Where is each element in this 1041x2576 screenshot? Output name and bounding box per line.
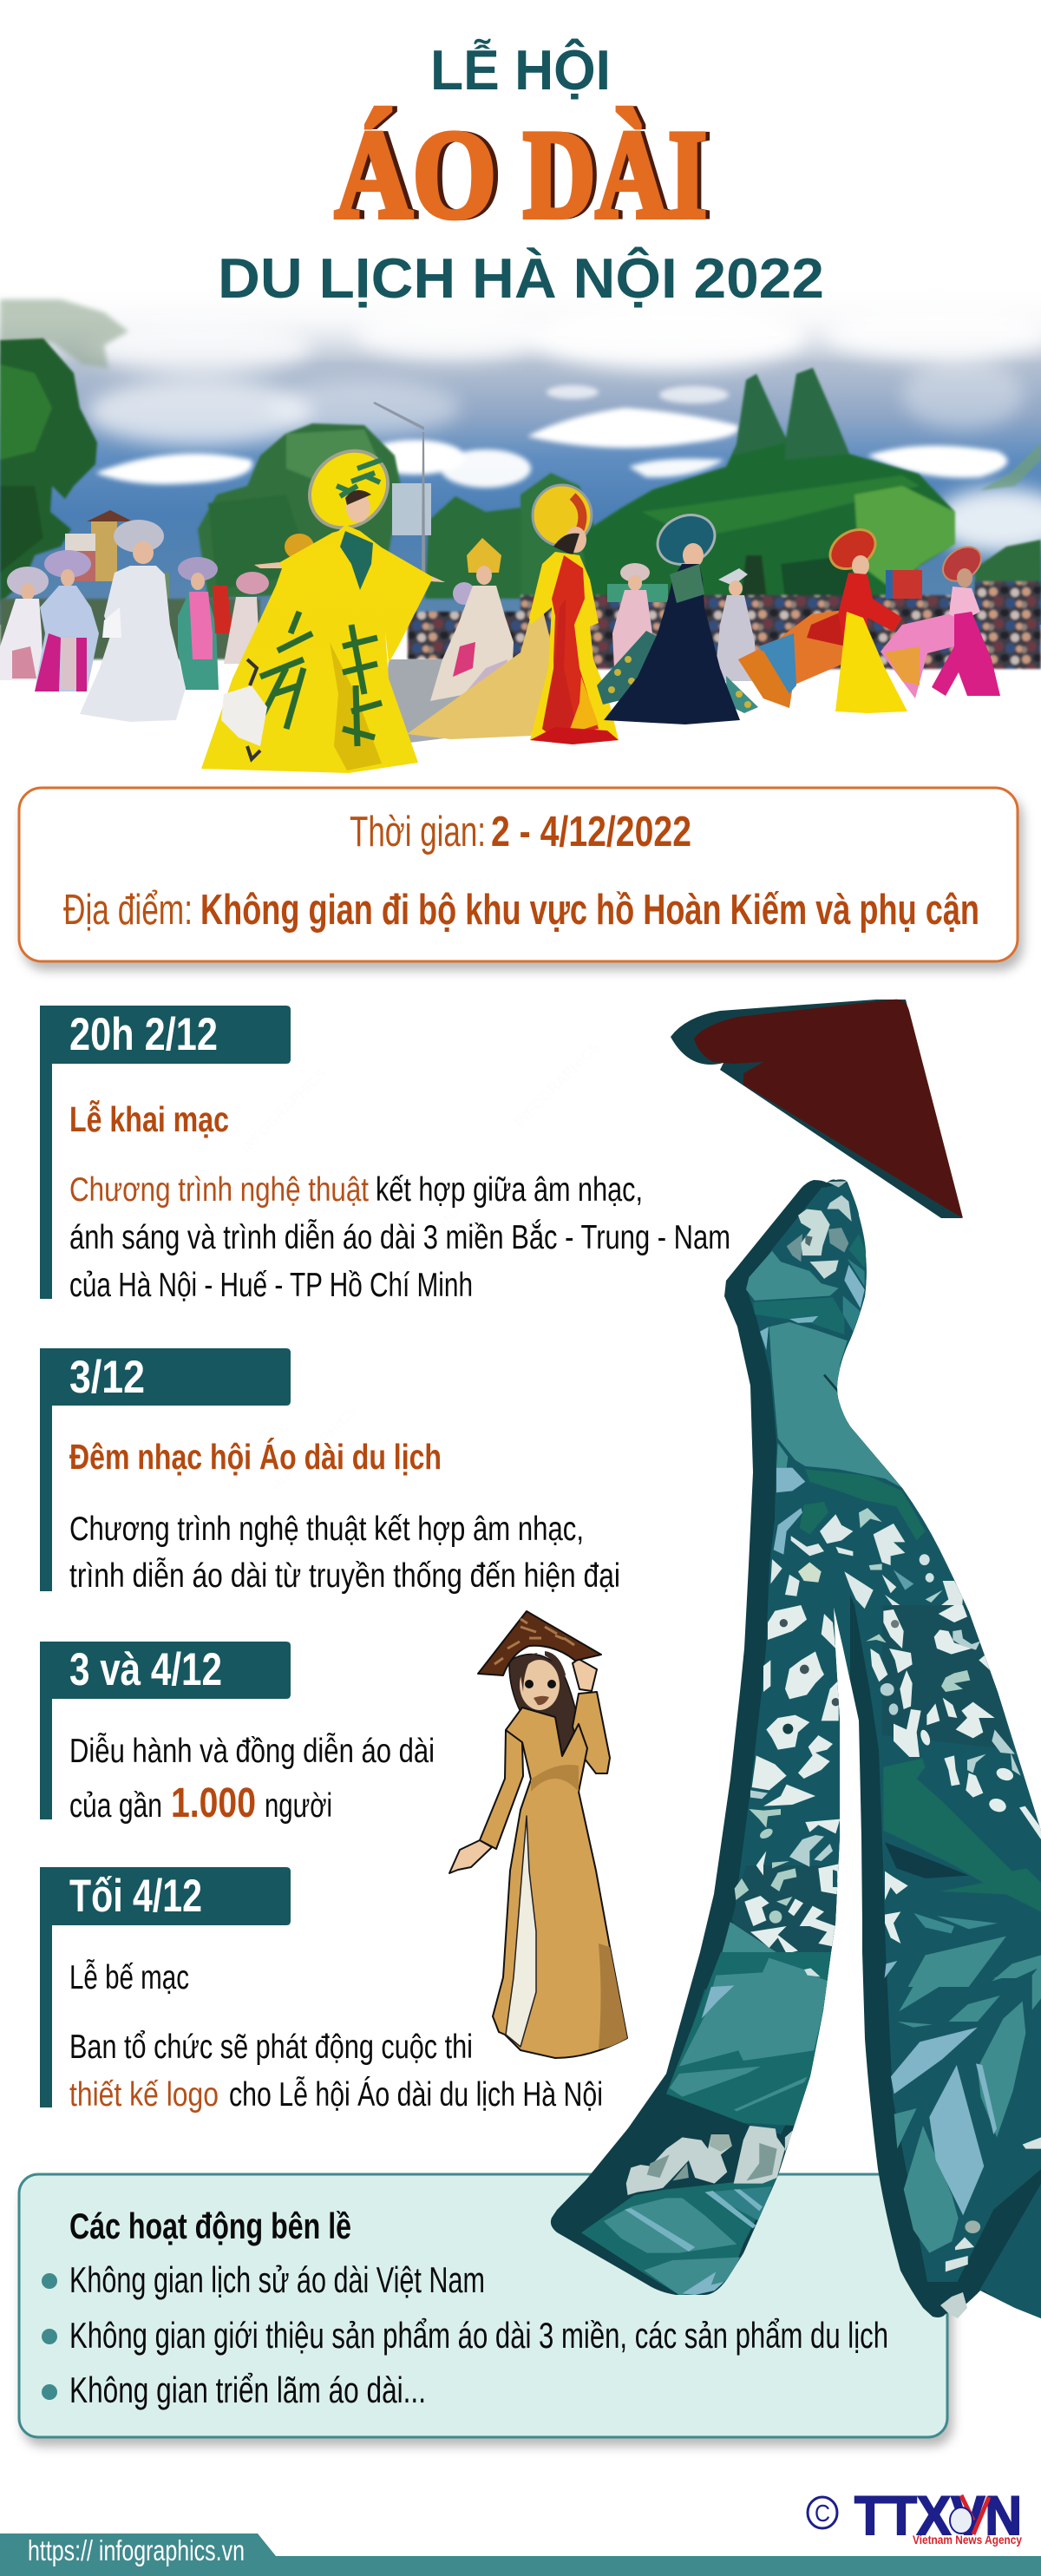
fringe bbox=[520, 1651, 566, 1692]
title line 2: áo dài: ÁO bbox=[335, 104, 496, 245]
body text: 1.000 bbox=[171, 1780, 256, 1826]
hair back bbox=[509, 1654, 579, 1756]
dress shade bbox=[599, 1943, 627, 2049]
body text: ánh sáng và trình diễn áo dài 3 miền Bắc - Trung - Nam bbox=[69, 1219, 730, 1256]
website url: https:// infographics.vn bbox=[28, 2534, 245, 2566]
title line 3: DU LỊCH HÀ NỘI 2022 bbox=[218, 246, 824, 310]
bullet 3: Không gian triển lãm áo dài... bbox=[69, 2370, 426, 2410]
copyright sign bbox=[808, 2497, 837, 2528]
watermarks: INFOGRAPHICS bbox=[238, 1065, 330, 1157]
dancer beige with gold crown bbox=[430, 538, 514, 701]
logo: TTXVN bbox=[808, 2486, 1022, 2547]
agency name: Vietnam News Agency bbox=[913, 2533, 1022, 2547]
raised arm bbox=[573, 1692, 610, 1773]
section: 3 và 4/12 bbox=[40, 1642, 435, 1826]
dress bbox=[493, 1708, 627, 2058]
conical hat bbox=[671, 1000, 963, 1218]
title line 1: LỄ HỘI bbox=[430, 38, 611, 102]
body text: kết hợp giữa âm nhạc, bbox=[376, 1171, 643, 1209]
mid-skirt shapes bbox=[713, 1605, 1041, 1987]
body text: Ban tổ chức sẽ phát động cuộc thi bbox=[69, 2029, 473, 2066]
time line bbox=[350, 809, 691, 855]
body text: của gần bbox=[69, 1787, 162, 1825]
inner fabric, left of and around the slit bbox=[666, 1180, 1041, 2282]
date: 20h 2/12 bbox=[69, 1009, 218, 1060]
body text bbox=[69, 1959, 603, 2114]
panel heading: Các hoạt động bên lề bbox=[69, 2206, 351, 2246]
gold crown behind main dancer bbox=[285, 534, 314, 560]
bullet 1 bbox=[42, 2259, 485, 2300]
left hand bbox=[449, 1840, 492, 1873]
dancer: navy dress with peacock train bbox=[597, 506, 758, 724]
watermarks: INFOGRAPHICS bbox=[494, 1819, 586, 1911]
dress fabric pattern bbox=[581, 1180, 1041, 2328]
white trousers bbox=[506, 1816, 536, 2047]
body text bbox=[69, 1511, 620, 1595]
section: Tối 4/12 bbox=[40, 1867, 603, 2114]
copyright sign: C bbox=[815, 2500, 830, 2527]
panel: time and place bbox=[19, 788, 1018, 961]
tab and rule bbox=[40, 1006, 291, 1299]
title line 2: áo dài: DÀI bbox=[527, 104, 711, 245]
place line: Địa điểm: bbox=[63, 887, 193, 934]
date: 3/12 bbox=[69, 1352, 145, 1403]
buildings and lamp post bbox=[61, 402, 431, 599]
dancer pink and green bbox=[178, 557, 219, 690]
title line 2: áo dài bbox=[335, 104, 711, 245]
body text: trình diễn áo dài từ truyền thống đến hiện đại bbox=[69, 1557, 620, 1595]
title line 2: áo dài: ÁO bbox=[340, 104, 501, 245]
date: 3 và 4/12 bbox=[69, 1644, 222, 1695]
body text: Diễu hành và đồng diễn áo dài bbox=[69, 1733, 435, 1770]
time line: 2 - 4/12/2022 bbox=[491, 809, 691, 855]
dancer pink pale bbox=[612, 563, 652, 668]
tab and rule bbox=[40, 1348, 291, 1591]
watermarks: TTXVN - VNA bbox=[390, 1201, 467, 1278]
conical hat bbox=[478, 1611, 601, 1675]
title line 2: áo dài: DÀI bbox=[523, 104, 707, 245]
dancer: yellow dress with red phoenix bbox=[407, 485, 619, 744]
title bbox=[218, 38, 824, 310]
lower skirt shapes bbox=[581, 1952, 1041, 2328]
heading: Lễ khai mạc bbox=[69, 1099, 229, 1139]
icon: large áo dài silhouette with conical hat bbox=[551, 1000, 1041, 2328]
icon: cartoon woman in áo dài with conical hat bbox=[449, 1611, 627, 2058]
raised hand bbox=[573, 1659, 597, 1691]
section: 3/12 bbox=[40, 1348, 620, 1595]
body text: thiết kế logo bbox=[69, 2076, 219, 2114]
section: 20h 2/12 bbox=[40, 1006, 730, 1304]
bullet 1: Không gian lịch sử áo dài Việt Nam bbox=[69, 2259, 485, 2300]
body text: của Hà Nội - Huế - TP Hồ Chí Minh bbox=[69, 1267, 473, 1304]
left arm bbox=[480, 1730, 523, 1849]
trees bbox=[0, 299, 1041, 603]
sky with clouds bbox=[0, 278, 1041, 625]
dancer far left bbox=[0, 567, 49, 680]
body text: người bbox=[265, 1787, 332, 1825]
globe mark bbox=[950, 2495, 989, 2534]
dancer: white dress bbox=[80, 520, 186, 722]
time line: Thời gian: bbox=[350, 809, 486, 855]
crowd bbox=[0, 570, 1041, 746]
tab and rule bbox=[40, 1867, 291, 2107]
body text bbox=[69, 1733, 435, 1826]
agency wordmark: TTXVN bbox=[854, 2486, 1022, 2547]
date: Tối 4/12 bbox=[69, 1871, 202, 1922]
tab and rule bbox=[40, 1642, 291, 1819]
face bbox=[520, 1660, 560, 1710]
hero photo: áo dài parade bbox=[0, 278, 1041, 773]
dancer red and white bbox=[213, 572, 269, 664]
dress base bbox=[551, 1179, 1041, 2318]
dancer: red and yellow dress with orange train bbox=[738, 521, 907, 713]
body text: Chương trình nghệ thuật bbox=[69, 1171, 369, 1209]
dancer: pink dress bbox=[881, 540, 1000, 698]
loose flower at hem bbox=[940, 2292, 967, 2318]
body text: Chương trình nghệ thuật kết hợp âm nhạc, bbox=[69, 1511, 584, 1548]
bodice shapes bbox=[746, 1181, 963, 1621]
dancer lilac grey bbox=[717, 568, 756, 681]
dancer: main yellow dress with bamboo bbox=[201, 435, 445, 773]
footer band bbox=[0, 2533, 1041, 2576]
dancer blue and magenta bbox=[35, 550, 99, 692]
background dancers bbox=[0, 534, 756, 701]
body text: Lễ bế mạc bbox=[69, 1959, 189, 1996]
watermarks: INFOGRAPHICS bbox=[511, 1039, 603, 1131]
panel: side activities bbox=[19, 2174, 947, 2437]
body text: cho Lễ hội Áo dài du lịch Hà Nội bbox=[229, 2076, 603, 2114]
heading: Đêm nhạc hội Áo dài du lịch bbox=[69, 1437, 442, 1477]
watermarks bbox=[238, 1039, 603, 1911]
body text bbox=[69, 1171, 730, 1304]
watermarks: INFOGRAPHICS bbox=[268, 1403, 360, 1495]
